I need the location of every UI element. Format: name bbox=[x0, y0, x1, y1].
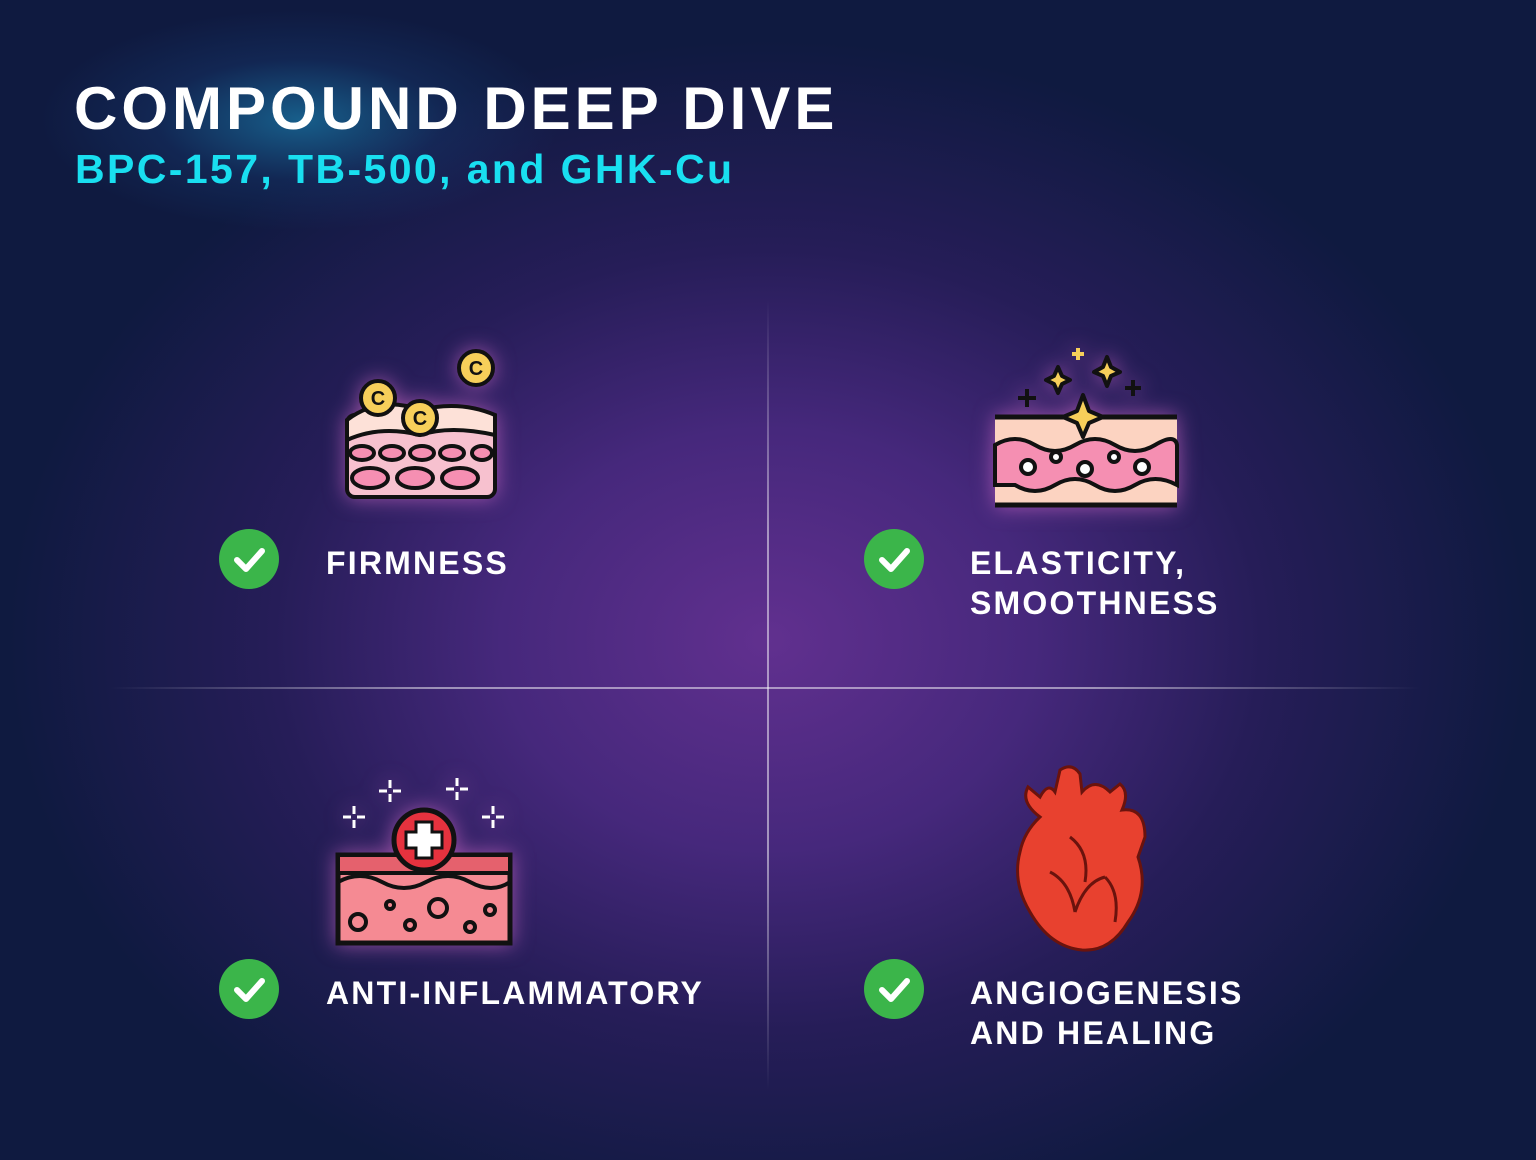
icon: heart bbox=[1016, 765, 1146, 952]
icon: firmness skin: C bbox=[469, 358, 483, 380]
title: COMPOUND DEEP DIVE bbox=[74, 75, 838, 142]
check 3 bbox=[219, 959, 279, 1019]
label: elasticity: SMOOTHNESS bbox=[970, 585, 1220, 621]
icon: elasticity skin bbox=[980, 344, 1192, 520]
icon: anti-inflammatory skin bbox=[322, 778, 526, 959]
check 1 bbox=[219, 529, 279, 589]
label: angiogenesis: AND HEALING bbox=[970, 1015, 1216, 1051]
check 2 bbox=[864, 529, 924, 589]
icon: firmness skin: C bbox=[413, 408, 427, 430]
subtitle: BPC-157, TB-500, and GHK-Cu bbox=[75, 146, 734, 192]
label: firmness: FIRMNESS bbox=[326, 545, 509, 581]
icon: firmness skin bbox=[332, 338, 510, 512]
check 4 bbox=[864, 959, 924, 1019]
label: elasticity: ELASTICITY, bbox=[970, 545, 1186, 581]
label: anti-inflammatory: ANTI-INFLAMMATORY bbox=[326, 975, 704, 1011]
label: angiogenesis: ANGIOGENESIS bbox=[970, 975, 1244, 1011]
icon: firmness skin: C bbox=[371, 388, 385, 410]
label: elasticity bbox=[970, 545, 1220, 621]
label: angiogenesis bbox=[970, 975, 1244, 1051]
